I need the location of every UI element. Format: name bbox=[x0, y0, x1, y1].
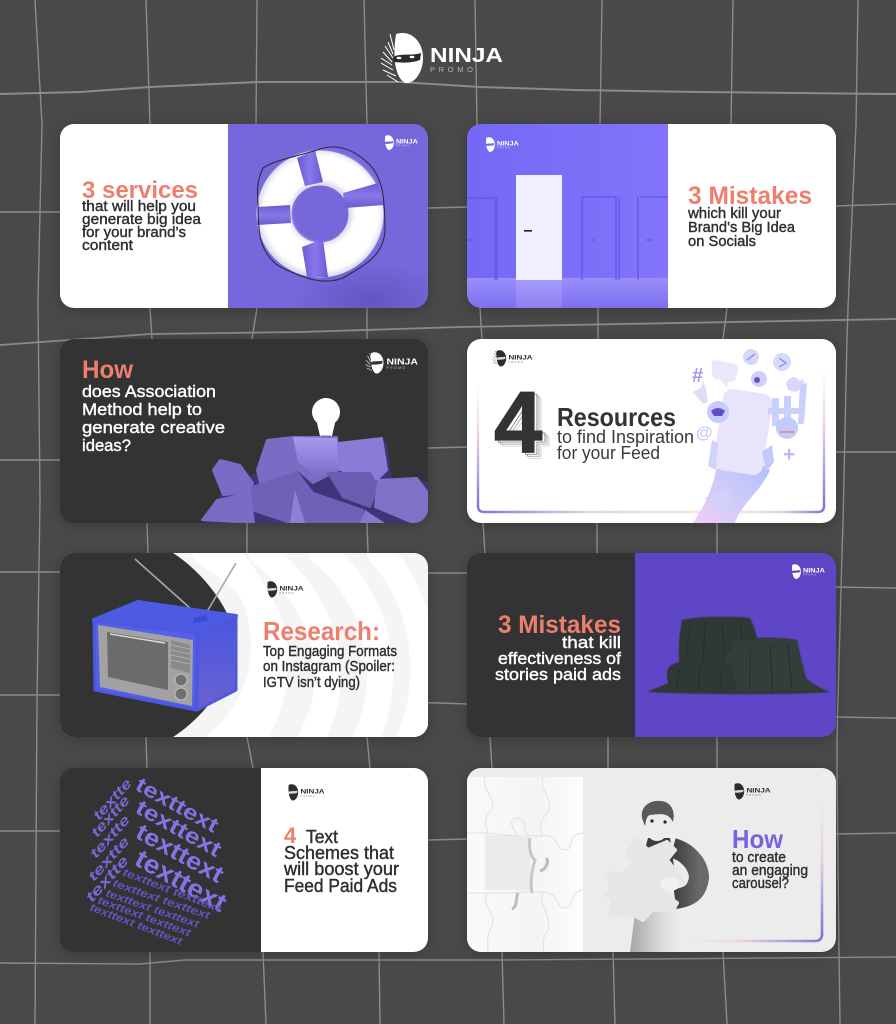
heading: on Socials bbox=[688, 233, 756, 250]
logo: NINJA bbox=[509, 355, 533, 362]
heading: an engaging bbox=[732, 863, 808, 879]
logo: NINJA bbox=[396, 140, 419, 146]
icon: social symbols bbox=[692, 349, 807, 466]
heading: on Instagram (Spoiler: bbox=[263, 659, 395, 675]
logo bbox=[734, 783, 771, 800]
illustration: rocks bbox=[202, 437, 428, 523]
illustration: doors bbox=[467, 175, 668, 308]
logo bbox=[288, 784, 325, 801]
big number 4: 4 bbox=[501, 380, 549, 477]
illustration: text cube: texttext texttext bbox=[111, 877, 213, 923]
heading: generate big idea bbox=[82, 211, 202, 228]
icon: retro TV bbox=[94, 559, 236, 710]
heading: Top Engaging Formats bbox=[263, 644, 397, 660]
illustration: text cube: textte bbox=[89, 775, 135, 823]
logo bbox=[492, 350, 533, 367]
swirl pattern bbox=[192, 553, 428, 737]
top logo: NINJA bbox=[430, 45, 503, 67]
logo bbox=[267, 581, 304, 598]
heading bbox=[284, 828, 399, 892]
gradient frame bbox=[707, 819, 824, 942]
logo: PROMO bbox=[396, 146, 409, 148]
logo: PROMO bbox=[803, 575, 816, 577]
logo: PROMO bbox=[387, 366, 405, 370]
logo: PROMO bbox=[509, 361, 523, 364]
heading: carousel? bbox=[732, 876, 789, 892]
heading: Feed Paid Ads bbox=[284, 876, 397, 896]
illustration: text cube: textte bbox=[86, 811, 133, 861]
illustration: text cube: texttext texttext bbox=[104, 887, 202, 931]
heading: IGTV isn’t dying) bbox=[263, 675, 360, 691]
top logo: PROMO bbox=[430, 65, 473, 74]
heading: that will help you bbox=[82, 198, 196, 215]
heading bbox=[732, 830, 808, 888]
icon: lifebuoy bbox=[257, 147, 385, 281]
heading bbox=[557, 408, 693, 463]
heading: effectiveness of bbox=[498, 649, 621, 668]
heading: to find Inspiration bbox=[557, 427, 694, 447]
heading: content bbox=[82, 237, 134, 254]
logo: NINJA bbox=[747, 788, 771, 795]
panel: research bbox=[60, 553, 428, 737]
icon: social symbols: # bbox=[692, 365, 703, 387]
heading: that kill bbox=[562, 633, 621, 652]
panel: association method bbox=[60, 339, 428, 523]
heading: for your Feed bbox=[557, 443, 660, 463]
illustration: text cube: texttext texttext bbox=[96, 895, 194, 940]
illustration: text cube: texttext texttext bbox=[121, 867, 224, 916]
gradient frame bbox=[477, 365, 825, 512]
logo bbox=[365, 352, 418, 374]
logo: PROMO bbox=[747, 794, 761, 797]
heading: which kill your bbox=[687, 205, 781, 222]
illustration: text cube: texttext bbox=[131, 819, 228, 889]
illustration: hand with phone bbox=[692, 349, 807, 523]
illustration: text cube: texttext bbox=[132, 795, 227, 862]
icon: social symbols: @ bbox=[696, 423, 713, 442]
heading: for your brand’s bbox=[82, 224, 186, 241]
illustration: text cube: textte bbox=[87, 792, 133, 840]
panel: 3 services bbox=[60, 124, 430, 310]
illustration: text cube: textte bbox=[84, 833, 133, 884]
logo bbox=[792, 564, 826, 579]
illustration: text cube: textte bbox=[82, 853, 132, 906]
illustration: text cube bbox=[87, 778, 227, 945]
big number 4 bbox=[494, 392, 550, 459]
icon: social symbols: + bbox=[783, 443, 795, 466]
big number 4: 4 bbox=[494, 374, 542, 471]
big number 4: 4 bbox=[499, 378, 547, 475]
heading bbox=[688, 186, 811, 246]
illustration: draped cloth podium bbox=[647, 617, 830, 694]
illustration: text cube: texttext bbox=[132, 773, 222, 837]
heading: Text bbox=[306, 827, 338, 847]
big number 4: 4 bbox=[497, 376, 545, 473]
panel: how to create carousel bbox=[467, 768, 836, 952]
illustration: puzzle wall bbox=[467, 777, 583, 952]
heading: to create bbox=[732, 850, 786, 866]
illustration: person holding puzzle piece bbox=[597, 801, 699, 952]
heading: Research: bbox=[263, 616, 380, 646]
heading: stories paid ads bbox=[495, 665, 621, 684]
heading: 3 services bbox=[82, 177, 198, 204]
heading bbox=[495, 611, 621, 684]
logo bbox=[486, 137, 520, 152]
heading: will boost your bbox=[283, 859, 399, 879]
heading: Brand’s Big Idea bbox=[688, 219, 796, 236]
illustration: text cube: texttext bbox=[130, 843, 232, 918]
heading bbox=[82, 177, 202, 254]
icon: light bulb bbox=[312, 398, 340, 436]
heading: does Association bbox=[82, 382, 216, 401]
heading: generate creative bbox=[82, 418, 225, 437]
panel: 3 mistakes stories bbox=[467, 553, 836, 737]
heading bbox=[263, 616, 397, 691]
logo: NINJA bbox=[280, 586, 304, 593]
heading: 3 Mistakes bbox=[498, 611, 621, 639]
logo: NINJA bbox=[301, 789, 325, 796]
panel: 3 mistakes big idea bbox=[467, 124, 836, 308]
heading: 4 bbox=[284, 823, 297, 848]
illustration: text cube: texttext texttext bbox=[88, 902, 185, 948]
logo: PROMO bbox=[497, 148, 510, 150]
logo bbox=[385, 135, 419, 150]
heading: How bbox=[732, 824, 784, 854]
panel: 4 text schemes bbox=[60, 768, 428, 952]
heading: Schemes that bbox=[284, 843, 394, 863]
heading: Method help to bbox=[82, 400, 202, 419]
logo: NINJA bbox=[497, 142, 520, 148]
top logo bbox=[381, 33, 503, 83]
logo: PROMO bbox=[301, 795, 315, 798]
logo: PROMO bbox=[280, 592, 294, 595]
heading: Resources bbox=[557, 402, 676, 432]
heading: ideas? bbox=[82, 436, 131, 455]
logo: NINJA bbox=[387, 356, 418, 366]
heading: How bbox=[82, 356, 134, 384]
heading bbox=[82, 356, 225, 455]
logo: NINJA bbox=[803, 569, 826, 575]
heading: 3 Mistakes bbox=[688, 182, 812, 210]
panel: 4 resources bbox=[467, 339, 836, 523]
